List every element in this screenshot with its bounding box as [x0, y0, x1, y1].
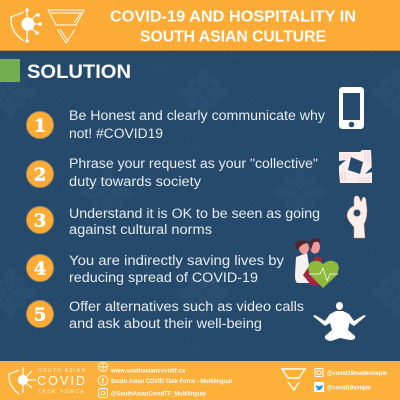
- icon: joined hands: [339, 150, 372, 183]
- number badge 3: [26, 206, 54, 234]
- icon: instagram: [315, 368, 323, 376]
- footer logo: SOUTH ASIAN: [38, 368, 85, 374]
- header banner: [0, 0, 400, 51]
- item 3 text: Understand it is OK to be seen as going: [69, 206, 320, 221]
- social links left: [98, 362, 232, 398]
- title: COVID-19 AND HOSPITALITY IN: [110, 8, 356, 26]
- number badge 2: [26, 160, 54, 188]
- icon: ok hand: [347, 196, 367, 238]
- number badge 4: [26, 254, 54, 282]
- item 4 text: reducing spread of COVID-19: [69, 270, 258, 285]
- social links right: @covid19madesimple: [327, 371, 388, 377]
- icon: globe: [98, 362, 108, 372]
- icon: twitter: [314, 382, 324, 392]
- item 3 text: [69, 206, 320, 237]
- item 3: [26, 196, 367, 238]
- social links right: @covid19simple: [327, 386, 372, 392]
- item 3 text: against cultural norms: [69, 222, 212, 237]
- footer logo: [9, 367, 85, 395]
- icon: phone: [339, 87, 364, 129]
- item 1: [26, 87, 364, 141]
- item 4 text: [69, 253, 284, 285]
- social links right: [314, 368, 388, 392]
- footer: [0, 361, 400, 400]
- icon: meditating figure: [313, 302, 366, 341]
- section heading: SOLUTION: [27, 61, 131, 83]
- section marker: [0, 59, 20, 82]
- header logo: shield virus: [11, 8, 42, 43]
- footer logo: TASK FORCE: [38, 389, 85, 395]
- item 1 text: not! #COVID19: [69, 126, 163, 141]
- icon: facebook: f: [102, 378, 104, 386]
- title: SOUTH ASIAN CULTURE: [140, 28, 326, 46]
- social links left: @SouthAsianCovidTF_Multilingual: [111, 392, 206, 398]
- number badge 1: 1: [34, 116, 46, 136]
- number badge 2: 2: [34, 164, 46, 186]
- item 1 text: [69, 108, 325, 141]
- footer triangle logo: [282, 369, 305, 390]
- item 2 text: duty towards society: [69, 174, 201, 189]
- number badge 5: 5: [34, 304, 46, 326]
- footer logo: COVID: [37, 374, 85, 388]
- title: [110, 8, 356, 46]
- social links left: www.southasiancovidtf.ca: [110, 368, 186, 374]
- social links left: South Asian COVID Task Force - Multilingual: [111, 379, 232, 385]
- number badge 1: [26, 112, 54, 138]
- item 4 text: You are indirectly saving lives by: [69, 253, 284, 268]
- item 2 text: Phrase your request as your "collective": [69, 156, 318, 171]
- item 5 text: [69, 299, 304, 331]
- icon: instagram: [98, 388, 108, 398]
- item 2: [26, 150, 372, 189]
- number badge 4: 4: [34, 258, 46, 280]
- item 5: [26, 299, 366, 341]
- item 2 text: [69, 156, 318, 189]
- number badge 3: 3: [34, 210, 46, 232]
- item 5 text: and ask about their well-being: [69, 316, 262, 331]
- item 1 text: Be Honest and clearly communicate why: [69, 108, 325, 123]
- item 5 text: Offer alternatives such as video calls: [69, 299, 304, 314]
- header logo: triangle: [48, 10, 84, 43]
- icon: embrace with heart: [295, 238, 339, 288]
- item 4: [26, 238, 339, 288]
- number badge 5: [26, 300, 54, 328]
